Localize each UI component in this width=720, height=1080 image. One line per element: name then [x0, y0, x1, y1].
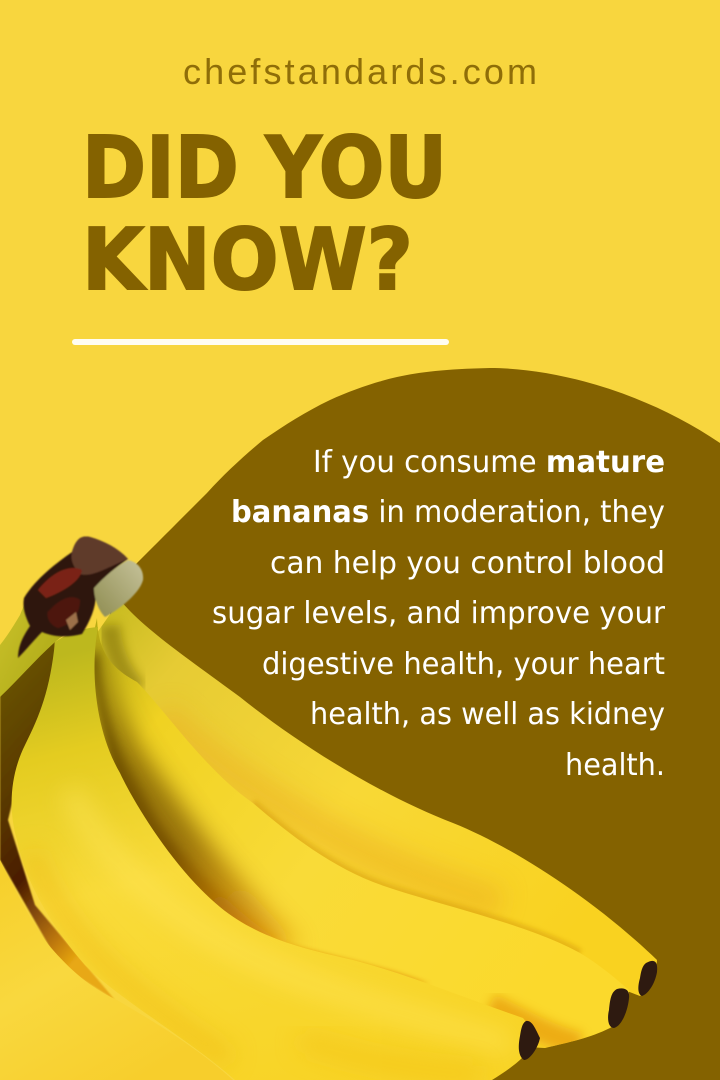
body text: If you consume mature: [313, 445, 665, 480]
dark gap behind bananas: [0, 640, 115, 1000]
banana 1 tip: [638, 961, 657, 996]
banana 2: middle: [88, 618, 629, 1048]
title: DID YOU: [82, 119, 447, 218]
divider line: [72, 339, 449, 345]
title: KNOW?: [82, 211, 413, 310]
left back stem: [0, 565, 70, 697]
body text: health.: [565, 748, 665, 783]
body text: can help you control blood: [270, 546, 665, 581]
body text: digestive health, your heart: [262, 647, 665, 682]
banana crown: [18, 536, 143, 658]
crown cap: [94, 560, 143, 617]
banana 2 tip: [608, 988, 629, 1028]
banana 4: lower left: [0, 860, 233, 1080]
body text: sugar levels, and improve your: [212, 596, 666, 631]
banana 3 tip: [519, 1021, 540, 1060]
body text: bananas in moderation, they: [231, 495, 665, 530]
body text: [212, 445, 666, 783]
dark brown curved panel: [110, 368, 720, 1080]
banana 3: front: [12, 627, 540, 1080]
banana bunch: [0, 536, 657, 1080]
body text: health, as well as kidney: [310, 697, 665, 732]
title: [82, 119, 447, 310]
banana 1: back right: [92, 600, 657, 996]
website name: chefstandards.com: [183, 51, 537, 92]
